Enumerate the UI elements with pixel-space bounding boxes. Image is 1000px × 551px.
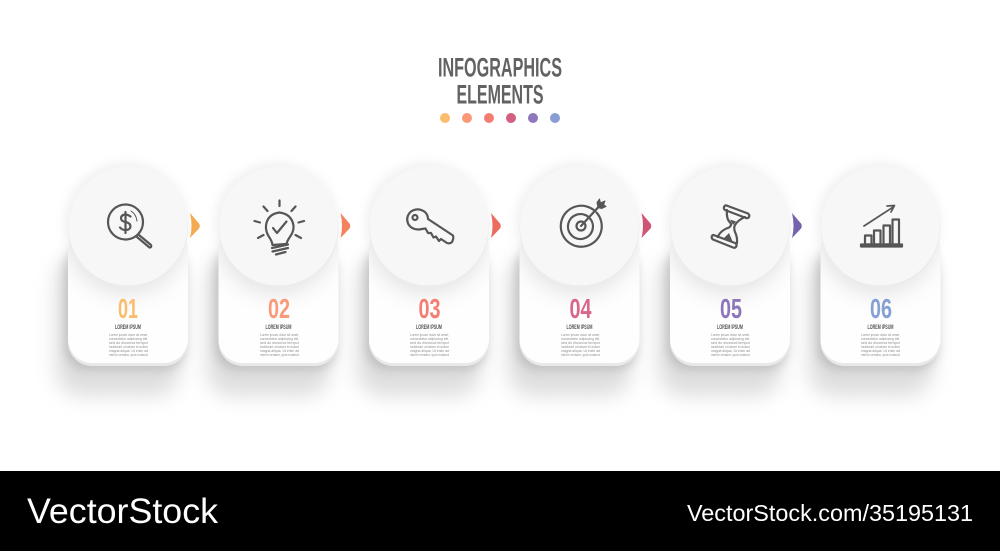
heading: LOREM IPSUM [115, 324, 141, 331]
panel: step 6 [818, 166, 940, 366]
number 05: 05 [720, 293, 742, 324]
number 01: 01 [118, 293, 138, 324]
icon: growth chart [861, 206, 902, 246]
body text [109, 333, 149, 357]
body text: Lorem ipsum dolor sit amet, [109, 333, 148, 337]
panel: step 2 [216, 166, 338, 366]
body text: magna aliqua. Ut enim ad [711, 349, 750, 353]
body text [260, 333, 300, 357]
arrow 4 [642, 213, 651, 238]
icon: dollar magnifier [108, 204, 151, 248]
number 02: 02 [268, 293, 290, 324]
body text: Lorem ipsum dolor sit amet, [410, 333, 449, 337]
body text [861, 333, 901, 357]
body text: incididunt ut labore et dolore [711, 345, 750, 349]
body text: magna aliqua. Ut enim ad [861, 349, 900, 353]
arrow 1 [190, 213, 200, 238]
body text: sed do eiusmod tempor [711, 341, 751, 345]
heading: LOREM IPSUM [717, 324, 743, 331]
body text: Lorem ipsum dolor sit amet, [711, 333, 750, 337]
icon: target [561, 199, 606, 247]
body text: sed do eiusmod tempor [260, 341, 300, 345]
body text [561, 333, 601, 357]
heading: LOREM IPSUM [868, 324, 894, 331]
body text: magna aliqua. Ut enim ad [260, 349, 299, 353]
body text: sed do eiusmod tempor [410, 341, 450, 345]
footer bar [0, 471, 1000, 551]
title [438, 52, 562, 110]
body text: minim veniam, quis nostrud [410, 353, 449, 357]
card shadows [56, 162, 940, 396]
footer logo text: VectorStock [27, 492, 219, 531]
panel: step 1 [66, 166, 188, 366]
body text: Lorem ipsum dolor sit amet, [561, 333, 600, 337]
body text: Lorem ipsum dolor sit amet, [861, 333, 900, 337]
body text: Lorem ipsum dolor sit amet, [260, 333, 299, 337]
body text: consectetur adipiscing elit, [561, 337, 600, 341]
arrow 5 [792, 213, 802, 238]
body text: magna aliqua. Ut enim ad [410, 349, 449, 353]
body text: incididunt ut labore et dolore [260, 345, 299, 349]
body text: consectetur adipiscing elit, [260, 337, 299, 341]
panel: step 5 [668, 166, 790, 366]
body text: consectetur adipiscing elit, [861, 337, 900, 341]
title: ELEMENTS [456, 80, 544, 110]
number 03: 03 [418, 293, 440, 324]
panel: step 4 [518, 166, 640, 366]
body text: minim veniam, quis nostrud [260, 353, 299, 357]
body text: minim veniam, quis nostrud [109, 353, 148, 357]
heading: LOREM IPSUM [266, 324, 292, 331]
colour dots [440, 113, 560, 123]
title: INFOGRAPHICS [438, 52, 562, 82]
body text: minim veniam, quis nostrud [861, 353, 900, 357]
footer url text: VectorStock.com/35195131 [687, 500, 973, 526]
icon: light bulb [254, 200, 304, 254]
body text: consectetur adipiscing elit, [410, 337, 449, 341]
heading: LOREM IPSUM [566, 324, 592, 331]
body text: magna aliqua. Ut enim ad [109, 349, 148, 353]
arrow 2 [340, 213, 350, 238]
body text: consectetur adipiscing elit, [109, 337, 148, 341]
body text: incididunt ut labore et dolore [861, 345, 900, 349]
icon: key [407, 209, 453, 243]
icon: hourglass [712, 205, 749, 248]
heading: LOREM IPSUM [416, 324, 442, 331]
arrow 3 [491, 213, 501, 238]
body text: minim veniam, quis nostrud [561, 353, 600, 357]
body text: incididunt ut labore et dolore [561, 345, 600, 349]
body text: minim veniam, quis nostrud [711, 353, 750, 357]
body text: sed do eiusmod tempor [109, 341, 149, 345]
number 06: 06 [870, 293, 892, 324]
body text [711, 333, 751, 357]
body text [410, 333, 450, 357]
body text: sed do eiusmod tempor [861, 341, 901, 345]
panel: step 3 [367, 166, 489, 366]
body text: incididunt ut labore et dolore [410, 345, 449, 349]
body text: incididunt ut labore et dolore [109, 345, 148, 349]
body text: consectetur adipiscing elit, [711, 337, 750, 341]
number 04: 04 [570, 293, 592, 324]
body text: magna aliqua. Ut enim ad [561, 349, 600, 353]
body text: sed do eiusmod tempor [561, 341, 601, 345]
